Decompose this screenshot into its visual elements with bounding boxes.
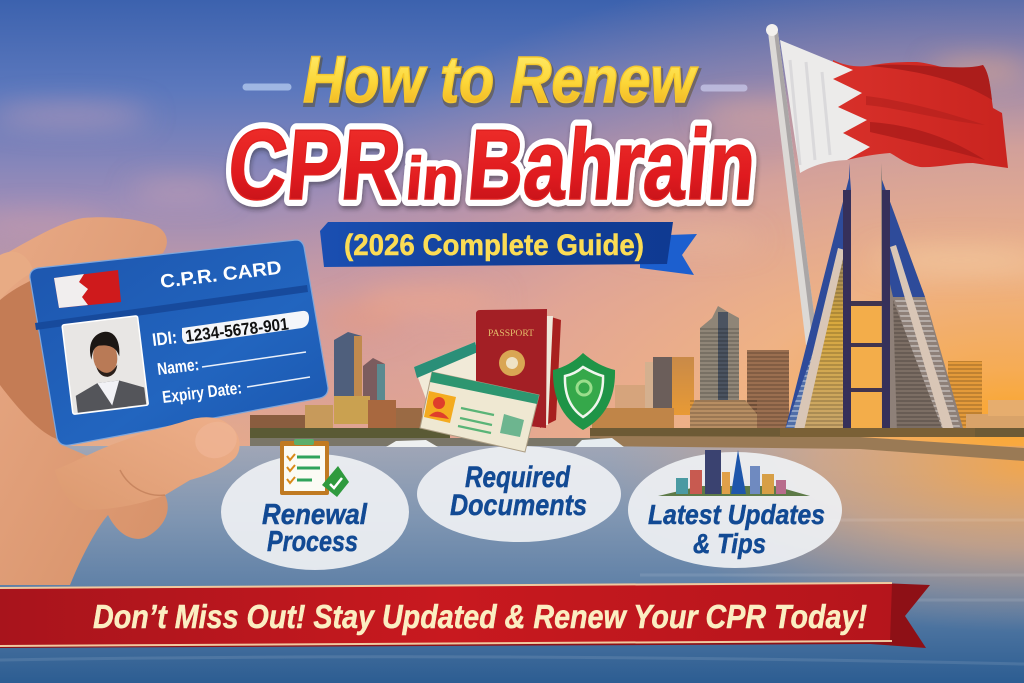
- Bahrain flag: [780, 40, 1008, 173]
- passport: PASSPORT: [488, 328, 535, 338]
- pill: latest updates and tips: & Tips: [693, 528, 766, 559]
- back ID card: [414, 342, 490, 410]
- pill: renewal process: [221, 439, 409, 570]
- hand: back of hand and fingers behind card: [0, 217, 190, 585]
- card flag: [54, 270, 121, 308]
- expiry field: [161, 377, 310, 407]
- ID number: [151, 311, 309, 350]
- pill: required documents: Documents: [450, 489, 587, 522]
- label: Latest Updates: [648, 499, 825, 530]
- photo: [62, 316, 148, 414]
- bottom banner: [0, 583, 930, 648]
- gap between towers: [851, 303, 882, 430]
- hand: thumb: [55, 417, 241, 510]
- icon group: documents and passport: [414, 309, 615, 452]
- ID card: [30, 240, 328, 445]
- subtitle ribbon: (2026 Complete Guide): [344, 229, 644, 262]
- water: [0, 446, 1024, 683]
- title: CPR in Bahrain: Bahrain: [464, 109, 760, 221]
- bridges: [851, 301, 882, 306]
- right tower: [881, 163, 965, 435]
- card heading: C.P.R. CARD: [159, 258, 283, 293]
- subtitle ribbon: [320, 222, 697, 275]
- name field: [156, 352, 306, 379]
- icon: mini skyline: [658, 450, 810, 496]
- title: CPR in Bahrain: [224, 109, 760, 221]
- passport: [476, 309, 561, 428]
- ID number: IDI:: [151, 327, 178, 350]
- pill: latest updates and tips: [628, 450, 842, 568]
- title: CPR in Bahrain: CPR: [224, 109, 405, 221]
- Bahrain World Trade Center towers: [780, 163, 975, 437]
- title: CPR in Bahrain: in: [403, 145, 461, 212]
- icon: green shield: [553, 353, 615, 430]
- pill: required documents: [417, 446, 621, 542]
- flagpole: [766, 24, 818, 345]
- pill: renewal process: Process: [267, 526, 358, 558]
- ID number: 1234-5678-901: [184, 314, 290, 346]
- label: Renewal: [262, 499, 368, 531]
- title: How to Renew: How to Renew: [303, 42, 698, 116]
- title: CPR in Bahrain: in: [403, 145, 461, 212]
- pill: required documents: Required: [465, 461, 571, 494]
- background: sunset sky: [0, 0, 1024, 450]
- skyline: left buildings: [250, 332, 450, 438]
- title: How to Renew: How to Renew: [304, 45, 699, 119]
- skyline: right buildings: [250, 306, 1024, 461]
- front ID card: [420, 372, 539, 452]
- icon: clipboard: [280, 439, 349, 497]
- left tower: [785, 163, 851, 430]
- title: CPR in Bahrain: CPR: [224, 109, 405, 221]
- name field: Name:: [156, 355, 200, 379]
- expiry field: Expiry Date:: [161, 378, 243, 407]
- title: CPR in Bahrain: Bahrain: [464, 109, 760, 221]
- bottom banner: Don’t Miss Out! Stay Updated & Renew Your CPR Today!: [93, 598, 867, 635]
